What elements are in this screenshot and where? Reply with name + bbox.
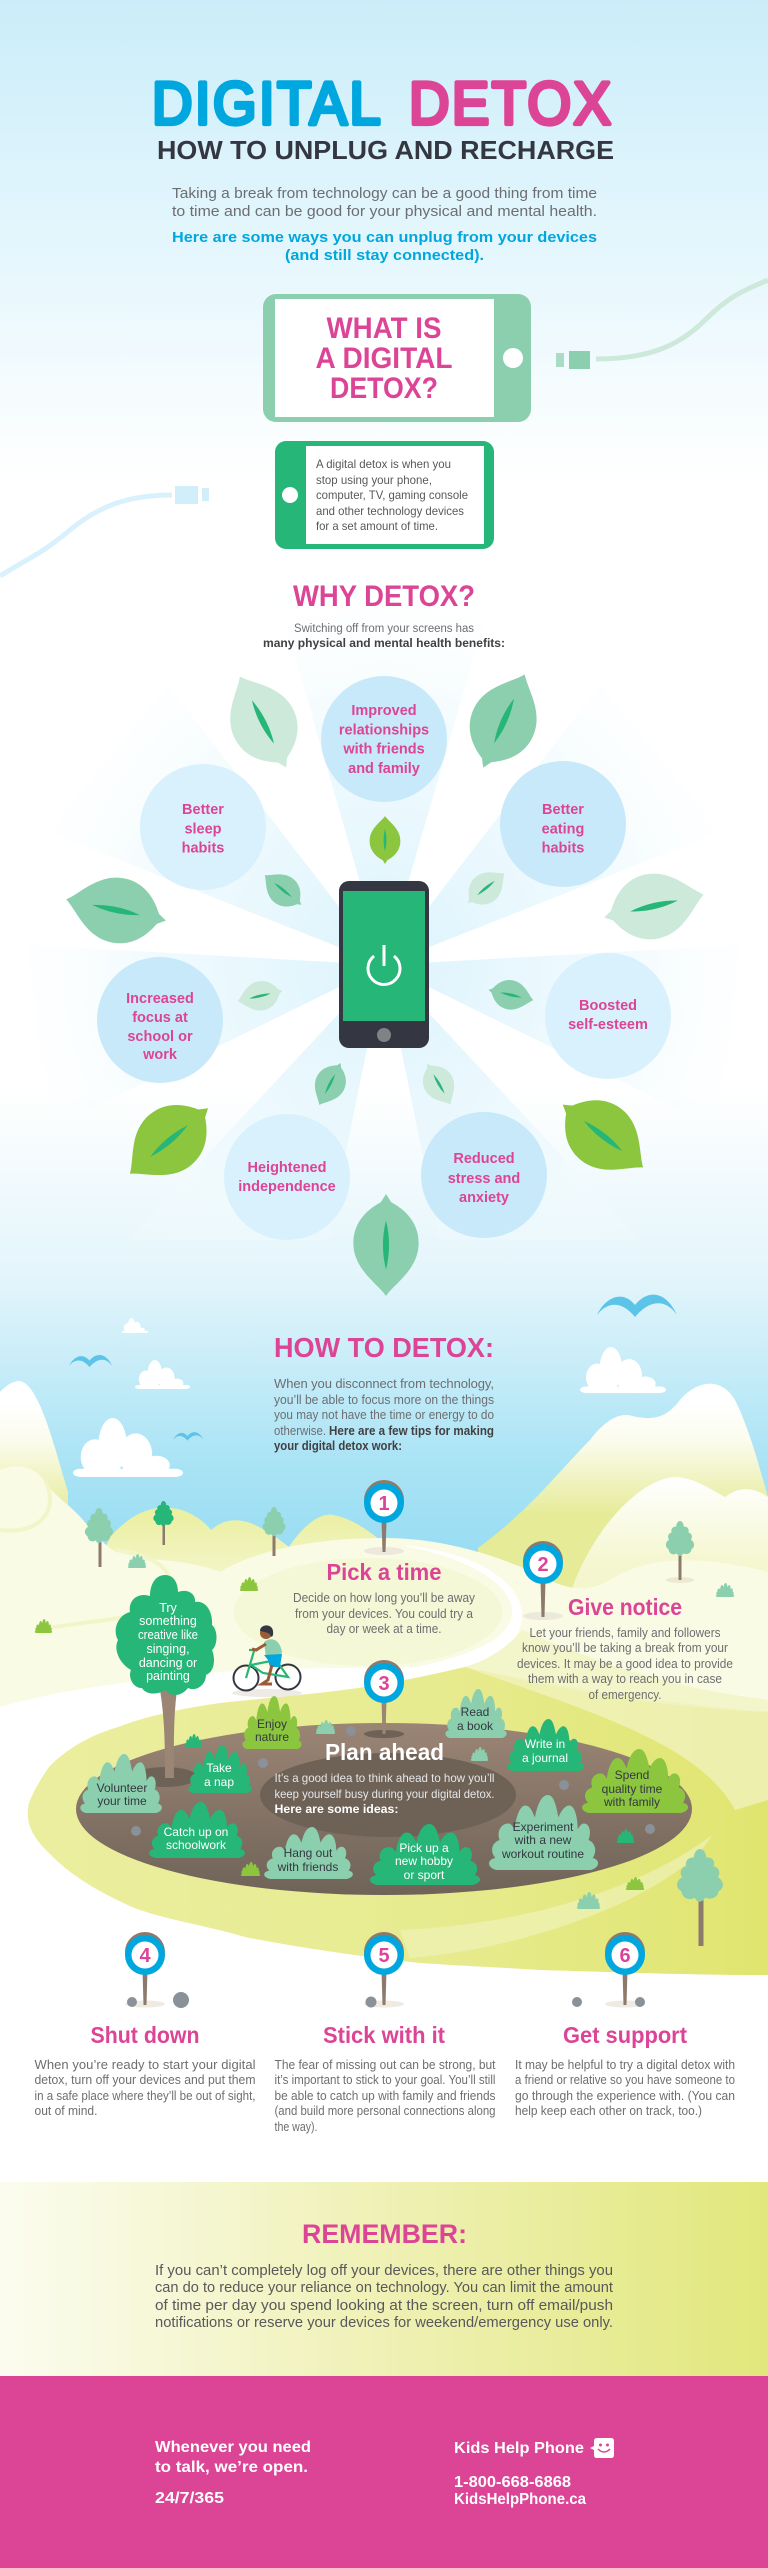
how to detox intro: you’ll be able to focus more on the things bbox=[274, 1392, 494, 1407]
benefit: improved relationships: with friends bbox=[342, 742, 425, 758]
step 3: plan ahead: keep yourself busy during your digital detox. bbox=[274, 1787, 494, 1801]
bush: write in a journal bbox=[507, 1719, 584, 1771]
signpost 5 bbox=[364, 1932, 404, 2008]
blue call to action: Here are some ways you can unplug from your devices bbox=[172, 230, 597, 246]
step 2: give notice: of emergency. bbox=[588, 1687, 662, 1702]
bush: take a nap bbox=[188, 1745, 252, 1793]
step 5: stick with it: Stick with it bbox=[323, 2022, 445, 2048]
panel: remember: notifications or reserve your devices for weekend/emergency use only. bbox=[155, 2315, 613, 2331]
signpost 2: 2 bbox=[537, 1554, 549, 1576]
step 3: plan ahead: Plan ahead bbox=[325, 1739, 444, 1765]
tree: lower right bbox=[677, 1849, 723, 1946]
bush: spend quality time: Spend bbox=[615, 1768, 649, 1782]
birds bbox=[69, 1295, 677, 1441]
title: DETOX bbox=[409, 70, 613, 137]
big tree: try something creative: something bbox=[139, 1614, 197, 1628]
background rays bbox=[28, 560, 740, 1240]
central phone with power icon bbox=[339, 881, 429, 1048]
phone: what is a digital detox bbox=[263, 294, 531, 422]
tree: dark green bbox=[153, 1501, 174, 1545]
panel: remember bbox=[0, 2182, 768, 2376]
benefit: increased focus: school or bbox=[127, 1029, 193, 1045]
benefit: better sleep: Better bbox=[182, 802, 224, 818]
step 1: pick a time bbox=[293, 1559, 475, 1636]
bush: spend quality time bbox=[582, 1749, 688, 1813]
tree: mint left bbox=[85, 1508, 113, 1567]
background: landscape sky bbox=[0, 1090, 768, 1610]
benefit: improved relationships: and family bbox=[348, 761, 420, 777]
step 2: give notice: Give notice bbox=[568, 1594, 682, 1620]
benefit: better sleep: sleep bbox=[184, 822, 222, 838]
bush: pick up a new hobby bbox=[370, 1824, 480, 1885]
step 1: pick a time: from your devices. You could try a bbox=[295, 1606, 474, 1621]
how to detox intro: Here are a few tips for making bbox=[329, 1423, 494, 1438]
step 6: get support: go through the experience with. (You can bbox=[515, 2088, 735, 2103]
bush: catch up on schoolwork bbox=[149, 1802, 245, 1858]
big tree: try something creative bbox=[116, 1575, 216, 1787]
bush: enjoy nature: Enjoy bbox=[257, 1717, 287, 1731]
benefit: better eating: habits bbox=[542, 840, 584, 856]
bush: pick up a new hobby: or sport bbox=[404, 1868, 445, 1882]
big tree: try something creative: painting bbox=[146, 1669, 190, 1683]
phone: definition bbox=[275, 441, 494, 549]
why detox intro: Switching off from your screens has bbox=[294, 623, 474, 635]
benefit: better sleep bbox=[140, 764, 266, 890]
signpost 1: 1 bbox=[378, 1493, 390, 1515]
tree: mint right bbox=[666, 1521, 694, 1583]
phone: definition: A digital detox is when you bbox=[316, 457, 451, 471]
step 2: give notice: devices. It may be a good idea to provide bbox=[517, 1656, 733, 1671]
signpost 3: 3 bbox=[378, 1673, 390, 1695]
big tree: try something creative: creative like bbox=[138, 1628, 198, 1642]
why detox intro bbox=[263, 623, 505, 650]
bush: take a nap: a nap bbox=[204, 1775, 234, 1789]
phone: definition: computer, TV, gaming console bbox=[316, 488, 468, 502]
benefit: reduced stress: Reduced bbox=[453, 1151, 515, 1167]
step 6: get support: It may be helpful to try a digital detox with bbox=[515, 2057, 735, 2072]
bush: volunteer: Volunteer bbox=[97, 1781, 147, 1795]
heading: why detox: WHY DETOX? bbox=[293, 580, 475, 613]
bush: catch up on schoolwork: schoolwork bbox=[166, 1838, 227, 1852]
phone: what is a digital detox: WHAT IS bbox=[326, 312, 442, 345]
bush: experiment with workout: Experiment bbox=[513, 1820, 574, 1834]
step 2: give notice: Let your friends, family and followers bbox=[530, 1625, 721, 1640]
stones on island bbox=[131, 1726, 655, 1836]
benefit: heightened independence: independence bbox=[238, 1179, 336, 1195]
step 4: shut down: detox, turn off your devices and put them bbox=[34, 2072, 256, 2087]
step 1: pick a time: day or week at a time. bbox=[326, 1621, 442, 1636]
step 2: give notice: them with a way to reach you in case bbox=[528, 1671, 722, 1686]
big tree: try something creative: singing, bbox=[146, 1642, 190, 1656]
panel: remember: of time per day you spend looking at the screen, turn off email/push bbox=[155, 2298, 613, 2314]
bush: pick up a new hobby: Pick up a bbox=[399, 1841, 449, 1855]
bush: enjoy nature: nature bbox=[255, 1730, 289, 1744]
panel: footer: 24/7/365 bbox=[155, 2490, 224, 2507]
why detox intro: many physical and mental health benefits: bbox=[263, 638, 505, 650]
panel: footer: Whenever you need bbox=[155, 2439, 311, 2456]
step 5: stick with it: (and build more personal connections along bbox=[274, 2103, 496, 2118]
step 5: stick with it bbox=[274, 2022, 496, 2134]
cyclist bbox=[232, 1625, 302, 1697]
phone: definition: and other technology devices bbox=[316, 504, 464, 518]
benefit: better eating bbox=[500, 761, 626, 887]
tree: mint middle bbox=[263, 1507, 285, 1556]
step 2: give notice: know you’ll be taking a break from your bbox=[522, 1640, 729, 1655]
bush: write in a journal: a journal bbox=[522, 1751, 568, 1765]
step 4: shut down: Shut down bbox=[90, 2022, 200, 2048]
step 5: stick with it: it’s important to stick to your goal. You’ll still bbox=[274, 2072, 496, 2087]
benefit: increased focus bbox=[97, 957, 223, 1083]
signpost 5: 5 bbox=[378, 1945, 390, 1967]
step 4: shut down: in a safe place where they’ll be out of sight, bbox=[34, 2088, 256, 2103]
bush: catch up on schoolwork: Catch up on bbox=[164, 1825, 228, 1839]
bush: volunteer: your time bbox=[97, 1794, 147, 1808]
bush: write in a journal: Write in bbox=[525, 1737, 565, 1751]
panel: footer: KidsHelpPhone.ca bbox=[454, 2491, 586, 2508]
subtitle: HOW TO UNPLUG AND RECHARGE bbox=[157, 135, 614, 165]
step 6: get support: help keep each other on track, too.) bbox=[515, 2103, 702, 2118]
signpost 6: 6 bbox=[619, 1945, 631, 1967]
bush: volunteer bbox=[80, 1754, 162, 1813]
bush: pick up a new hobby: new hobby bbox=[395, 1854, 453, 1868]
title bbox=[152, 70, 613, 137]
signpost 1 bbox=[364, 1480, 404, 1555]
signpost 2 bbox=[523, 1541, 563, 1620]
bush: take a nap: Take bbox=[206, 1761, 232, 1775]
panel: footer: Kids Help Phone bbox=[454, 2440, 584, 2457]
benefit: improved relationships: relationships bbox=[339, 722, 429, 738]
step 3: plan ahead bbox=[274, 1739, 494, 1816]
panel: footer bbox=[0, 2376, 768, 2568]
step 2: give notice bbox=[517, 1594, 733, 1702]
heading: how to detox: HOW TO DETOX: bbox=[274, 1332, 494, 1363]
signpost 4 bbox=[125, 1932, 189, 2008]
bush: experiment with workout bbox=[489, 1795, 598, 1870]
bush: spend quality time: quality time bbox=[602, 1782, 663, 1796]
benefit: better eating: eating bbox=[542, 822, 584, 838]
bush: experiment with workout: workout routine bbox=[501, 1847, 584, 1861]
intro text: to time and can be good for your physical and mental health. bbox=[172, 204, 597, 220]
step 3: plan ahead: It’s a good idea to think ahead to how you’ll bbox=[274, 1771, 494, 1785]
benefit: reduced stress: stress and bbox=[448, 1171, 520, 1187]
bush: enjoy nature bbox=[242, 1696, 302, 1749]
step 5: stick with it: The fear of missing out can be strong, but bbox=[274, 2057, 496, 2072]
background: top sky bbox=[0, 0, 768, 480]
how to detox intro: you may not have the time or energy to do bbox=[274, 1407, 494, 1422]
island ground bbox=[76, 1723, 692, 1895]
benefit: better eating: Better bbox=[542, 802, 584, 818]
step 6: get support: Get support bbox=[563, 2022, 687, 2048]
step 5: stick with it: the way). bbox=[274, 2119, 318, 2134]
bush: hang out with friends bbox=[264, 1827, 353, 1879]
intro text: Taking a break from technology can be a good thing from time bbox=[172, 186, 597, 202]
blue call to action: (and still stay connected). bbox=[285, 248, 484, 264]
step 6: get support: a friend or relative so you have someone to bbox=[515, 2072, 735, 2087]
step 4: shut down: When you’re ready to start your digital bbox=[34, 2057, 256, 2072]
title: DIGITAL bbox=[152, 70, 383, 137]
step 4: shut down: out of mind. bbox=[34, 2103, 98, 2118]
step 6: get support bbox=[515, 2022, 735, 2118]
how to detox intro bbox=[274, 1376, 494, 1453]
benefit: improved relationships bbox=[321, 676, 447, 802]
step 1: pick a time: Decide on how long you’ll be away bbox=[293, 1590, 475, 1605]
how to detox intro: your digital detox work: bbox=[274, 1438, 402, 1453]
phone: what is a digital detox: A DIGITAL bbox=[316, 342, 452, 375]
leaves around the phone bbox=[59, 661, 711, 1296]
panel: footer: 1-800-668-6868 bbox=[454, 2474, 571, 2491]
benefit: boosted self-esteem bbox=[545, 953, 671, 1079]
blue call to action bbox=[172, 230, 597, 264]
small shrubs on island bbox=[185, 1720, 644, 1909]
cable: green charger bbox=[556, 280, 768, 369]
step 5: stick with it: be able to catch up with family and friends bbox=[274, 2088, 496, 2103]
big tree: try something creative: Try bbox=[159, 1601, 178, 1615]
bush: read a book: a book bbox=[457, 1719, 494, 1733]
small shrubs bbox=[35, 1554, 734, 1633]
icon: kids help phone logo bbox=[590, 2438, 614, 2458]
step 3: plan ahead: Here are some ideas: bbox=[274, 1802, 398, 1816]
signpost 3 bbox=[364, 1660, 404, 1738]
benefit: increased focus: Increased bbox=[126, 991, 194, 1007]
benefit: improved relationships: Improved bbox=[351, 703, 417, 719]
benefit: boosted self-esteem: self-esteem bbox=[568, 1017, 648, 1033]
bush: hang out with friends: with friends bbox=[277, 1860, 338, 1874]
benefit: boosted self-esteem: Boosted bbox=[579, 998, 637, 1014]
intro text bbox=[172, 186, 597, 220]
background: hills bbox=[0, 1381, 768, 1975]
benefit: reduced stress: anxiety bbox=[459, 1190, 509, 1206]
step 4: shut down bbox=[34, 2022, 256, 2118]
phone: definition: stop using your phone, bbox=[316, 473, 432, 487]
phone: definition: for a set amount of time. bbox=[316, 519, 438, 533]
step 1: pick a time: Pick a time bbox=[326, 1559, 442, 1585]
panel: footer: to talk, we’re open. bbox=[155, 2459, 308, 2476]
benefit: better sleep: habits bbox=[182, 840, 224, 856]
benefit: heightened independence: Heightened bbox=[248, 1160, 326, 1176]
benefit: reduced stress bbox=[421, 1112, 547, 1238]
signpost 6 bbox=[572, 1932, 645, 2008]
how to detox intro: When you disconnect from technology, bbox=[274, 1376, 494, 1391]
how to detox intro: otherwise. bbox=[274, 1423, 326, 1438]
panel: remember: If you can’t completely log off your devices, there are other things you bbox=[155, 2263, 613, 2279]
bush: experiment with workout: with a new bbox=[514, 1833, 572, 1847]
bush: read a book: Read bbox=[461, 1705, 489, 1719]
benefit: increased focus: focus at bbox=[132, 1010, 188, 1026]
bush: spend quality time: with family bbox=[603, 1795, 660, 1809]
bush: read a book bbox=[445, 1689, 507, 1738]
big tree: try something creative: dancing or bbox=[139, 1656, 197, 1670]
benefit: increased focus: work bbox=[142, 1047, 178, 1063]
phone: what is a digital detox: DETOX? bbox=[330, 372, 438, 405]
clouds bbox=[73, 1318, 666, 1477]
benefit: heightened independence bbox=[224, 1114, 350, 1240]
bush: hang out with friends: Hang out bbox=[284, 1846, 333, 1860]
cable: blue charger bbox=[0, 486, 209, 576]
signpost 4: 4 bbox=[139, 1945, 151, 1967]
panel: remember: can do to reduce your reliance on technology. You can limit the amount bbox=[155, 2280, 613, 2296]
panel: remember: REMEMBER: bbox=[302, 2219, 467, 2249]
